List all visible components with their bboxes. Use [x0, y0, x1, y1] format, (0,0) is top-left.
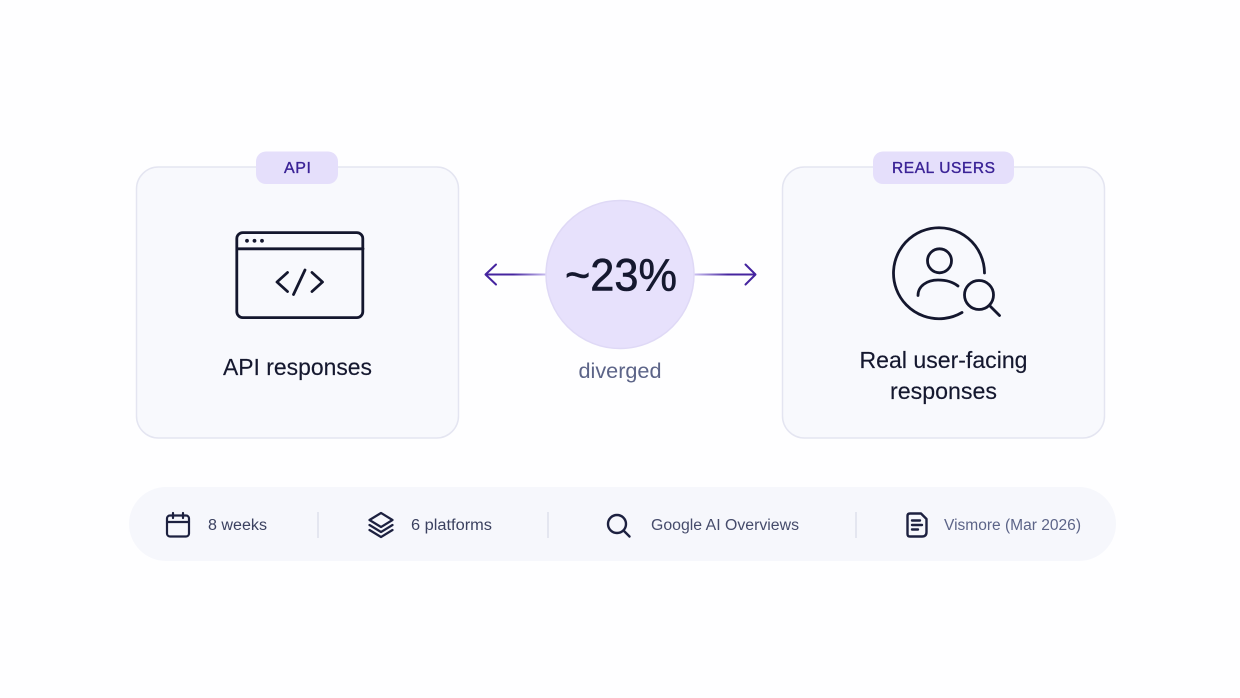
icon: document	[908, 514, 926, 536]
footer bar	[129, 487, 1116, 561]
panel: API	[136, 152, 458, 438]
item: 8 weeks	[167, 513, 267, 536]
arrow: left	[486, 264, 546, 284]
badge: API	[256, 152, 338, 184]
caption: diverged: diverged	[578, 360, 662, 383]
icon: calendar	[167, 513, 189, 536]
stat circle: ~23%: ~23%	[565, 250, 677, 300]
item: Google AI Overviews: Google AI Overviews	[651, 517, 799, 534]
label: API responses: API responses	[223, 354, 372, 380]
item: 6 platforms	[370, 513, 492, 537]
icon: code window	[237, 233, 363, 318]
stat circle: ~23%	[546, 200, 694, 348]
label: real user-facing responses: Real user-facing	[860, 347, 1028, 373]
item: 6 platforms: 6 platforms	[411, 517, 492, 534]
badge: real users: REAL USERS	[892, 160, 995, 177]
icon: search	[608, 515, 630, 536]
panel: real users	[782, 152, 1104, 438]
badge: real users	[873, 152, 1014, 184]
arrow: right	[695, 264, 756, 284]
icon: user with magnifier	[894, 228, 1000, 319]
item: Google AI Overviews	[608, 515, 799, 536]
label: real user-facing responses: responses	[890, 378, 997, 404]
item: 8 weeks: 8 weeks	[208, 517, 267, 534]
label: real user-facing responses	[860, 347, 1028, 404]
item: Vismore (Mar 2026)	[908, 514, 1081, 536]
icon: layers	[370, 513, 392, 537]
badge: API: API	[284, 160, 311, 177]
item: Vismore (Mar 2026): Vismore (Mar 2026)	[944, 517, 1081, 534]
